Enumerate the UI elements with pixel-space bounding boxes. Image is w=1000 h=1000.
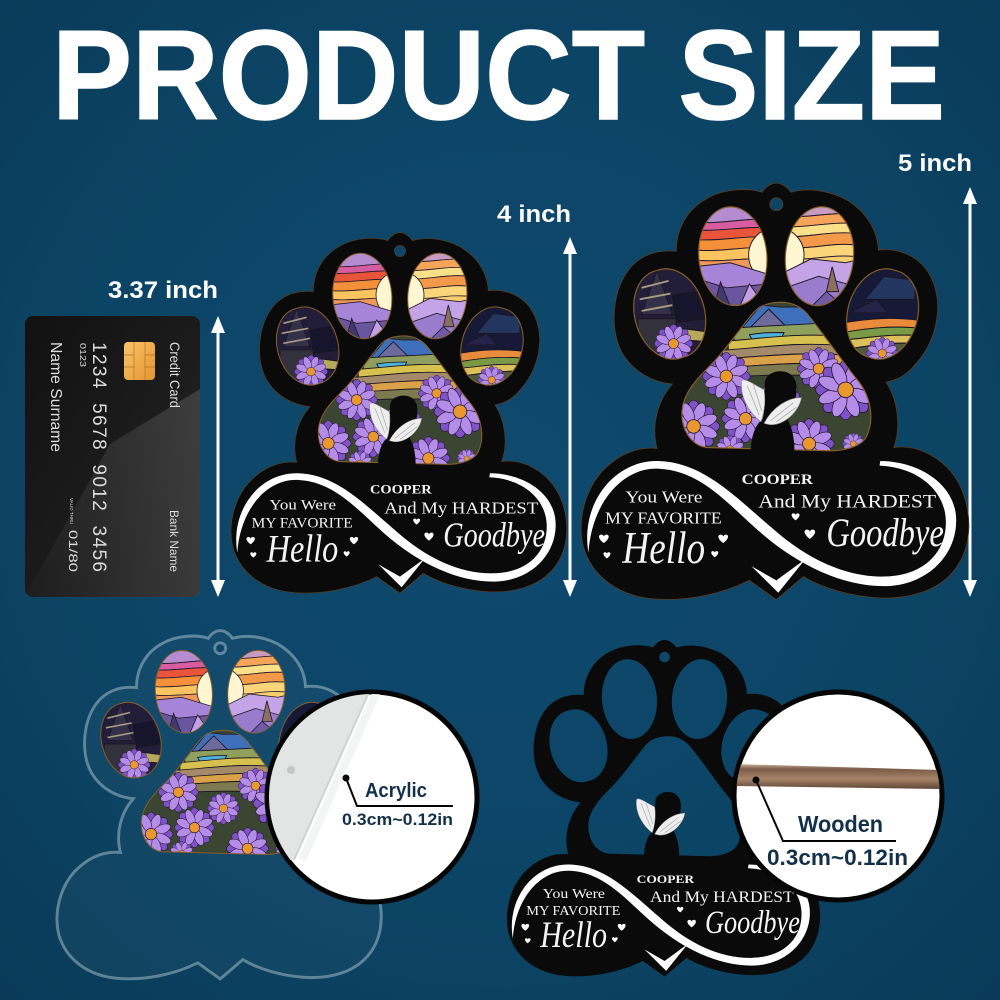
ornament text: COOPER <box>370 482 433 496</box>
ornament text: And My HARDEST <box>758 491 936 512</box>
callout: acrylic thickness <box>262 690 477 902</box>
card valid thru: VALID THRU <box>69 498 74 524</box>
callout: wooden thickness <box>734 692 942 900</box>
callout size: 0.3cm~0.12in <box>767 845 908 870</box>
callout label: Acrylic <box>365 780 427 802</box>
ornament text <box>252 482 545 571</box>
callout leader line <box>346 778 453 806</box>
card code: 0123 <box>78 343 87 368</box>
callout size: 0.3cm~0.12in <box>342 810 453 829</box>
label: 4 inch: 4 inch <box>497 201 571 228</box>
arrow: card height <box>211 316 225 597</box>
ornament: wooden layer <box>507 640 820 976</box>
label: 3.37 inch: 3.37 inch <box>108 277 218 304</box>
ornament text: MY FAVORITE <box>252 515 353 531</box>
ornament: medium 4 inch <box>231 233 567 593</box>
ornament text: Goodbye <box>443 516 545 555</box>
card number: 1234 5678 9012 3456 <box>88 342 109 572</box>
card label: Credit Card: Credit Card <box>167 342 183 408</box>
arrow: large height <box>963 187 977 597</box>
label: 5 inch: 5 inch <box>898 150 972 177</box>
card name: Name Surname <box>47 342 64 452</box>
ornament: acrylic layer <box>57 631 381 979</box>
ornament text: And My HARDEST <box>384 498 538 517</box>
ornament text: Goodbye <box>826 510 944 555</box>
callout label: Wooden <box>798 811 883 837</box>
callout leader line <box>756 780 896 841</box>
card label: Bank Name: Bank Name <box>167 510 181 572</box>
ornament text <box>605 472 944 573</box>
ornament text: Goodbye <box>705 905 800 941</box>
ornament text: You Were <box>543 886 605 901</box>
ornament text: Hello <box>622 523 705 573</box>
card expiry: 01/80 <box>66 530 80 572</box>
ornament text: COOPER <box>637 872 695 886</box>
panel: credit card <box>25 316 200 597</box>
arrow: medium height <box>563 237 577 597</box>
ornament text: COOPER <box>742 472 813 488</box>
ornament text: You Were <box>625 488 702 507</box>
ornament text <box>526 872 800 955</box>
ornament text: MY FAVORITE <box>605 508 722 527</box>
ornament text: And My HARDEST <box>650 889 794 906</box>
ornament text: Hello <box>539 914 607 955</box>
ornament text: You Were <box>269 497 336 513</box>
ornament: large 5 inch <box>581 183 969 600</box>
title: PRODUCT SIZE <box>52 4 945 146</box>
ornament text: MY FAVORITE <box>526 903 620 918</box>
ornament text: Hello <box>266 527 338 571</box>
card chip <box>124 342 155 380</box>
